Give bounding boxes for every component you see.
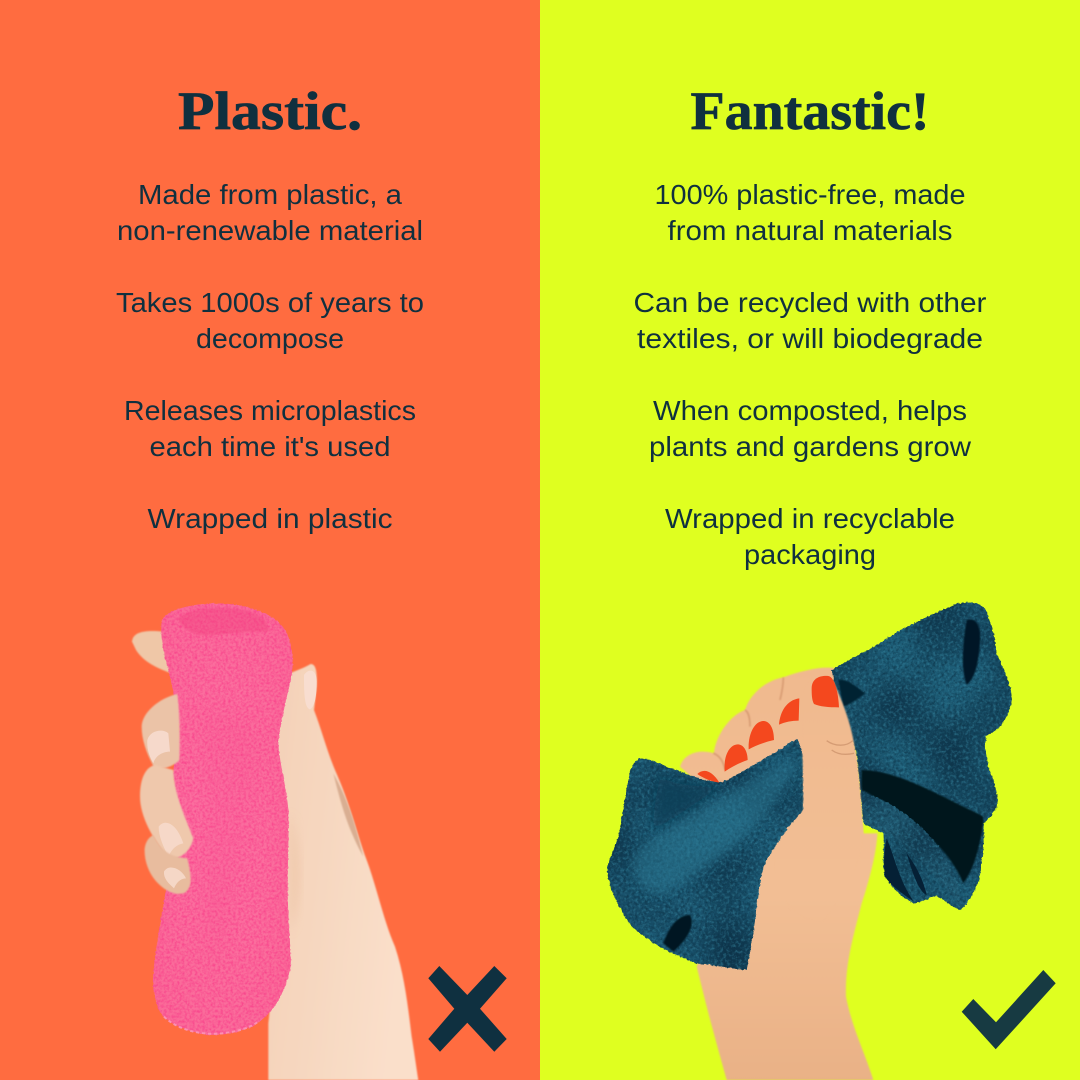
nail 3 [724, 744, 748, 772]
text block: plastic point 2: decompose [196, 323, 344, 354]
finger 2 [142, 694, 180, 768]
cloth roll top [178, 608, 269, 635]
finger 1 [132, 631, 173, 674]
lower fold highlight [864, 793, 961, 905]
panel: plastic background [0, 0, 540, 1080]
text block: fantastic point 4: Wrapped in recyclable [665, 503, 955, 534]
nail 2 [749, 721, 774, 749]
text block: fantastic point 2: Can be recycled with other [634, 287, 986, 318]
folds lower dark ridges [884, 838, 927, 902]
text block: fantastic point 3: plants and gardens grow [649, 431, 972, 462]
hand and wrist [680, 668, 877, 1080]
finger 4 [145, 835, 191, 894]
text block: fantastic point 4 [665, 503, 955, 570]
text block: fantastic point 1 [654, 179, 966, 246]
text block: plastic point 2 [116, 287, 424, 354]
text block: fantastic point 4: packaging [744, 539, 876, 570]
icon: check mark [962, 970, 1056, 1049]
finger gap shading [713, 677, 783, 770]
text block: plastic point 3: each time it's used [150, 431, 390, 462]
thumb [774, 675, 863, 923]
text block: plastic point 1: Made from plastic, a [138, 179, 402, 210]
heading: Fantastic: Fantastic! [690, 81, 930, 141]
text block: fantastic point 2: textiles, or will biodegrade [637, 323, 983, 354]
cloth shading [200, 709, 260, 973]
text block: plastic point 1: non-renewable material [117, 215, 423, 246]
nail 4 [697, 771, 719, 783]
text block: plastic point 3 [124, 395, 416, 462]
nail 3 [159, 823, 183, 857]
text block: fantastic point 3: When composted, helps [653, 395, 967, 426]
finger 3 [140, 765, 193, 859]
nail 1 [779, 698, 799, 725]
icon: cross [428, 966, 507, 1052]
text block: plastic point 3: Releases microplastics [124, 395, 416, 426]
nail 4 [164, 867, 186, 888]
dark shadow on left cloth [663, 915, 692, 952]
blue cloth right part [832, 603, 1012, 909]
panel: fantastic background [540, 0, 1080, 1080]
heading: Plastic: Plastic. [178, 81, 362, 141]
text block: fantastic point 1: 100% plastic-free, made [654, 179, 966, 210]
knuckle crease [827, 741, 854, 754]
dark fold top [963, 619, 980, 685]
nail 2 [147, 731, 170, 763]
illustration: hand squeezing blue natural cloth [607, 603, 1012, 1080]
text block: plastic point 2: Takes 1000s of years to [116, 287, 424, 318]
cloth hem [164, 1017, 259, 1034]
cloth highlight [633, 757, 797, 893]
illustration: hand holding pink rolled microfibre cloth [132, 603, 418, 1080]
palm shading [287, 807, 300, 933]
text block: fantastic point 2 [634, 287, 986, 354]
text block: plastic point 4: Wrapped in plastic [148, 503, 392, 534]
blue cloth left part [607, 738, 803, 970]
pink cloth [153, 603, 293, 1035]
nail thumb [812, 676, 839, 707]
text block: plastic point 1 [117, 179, 423, 246]
text block: fantastic point 1: from natural materials [668, 215, 952, 246]
thumb nail [304, 671, 317, 709]
text block: fantastic point 3 [649, 395, 972, 462]
dark folds right [862, 770, 983, 883]
hand palm and wrist [268, 664, 418, 1080]
